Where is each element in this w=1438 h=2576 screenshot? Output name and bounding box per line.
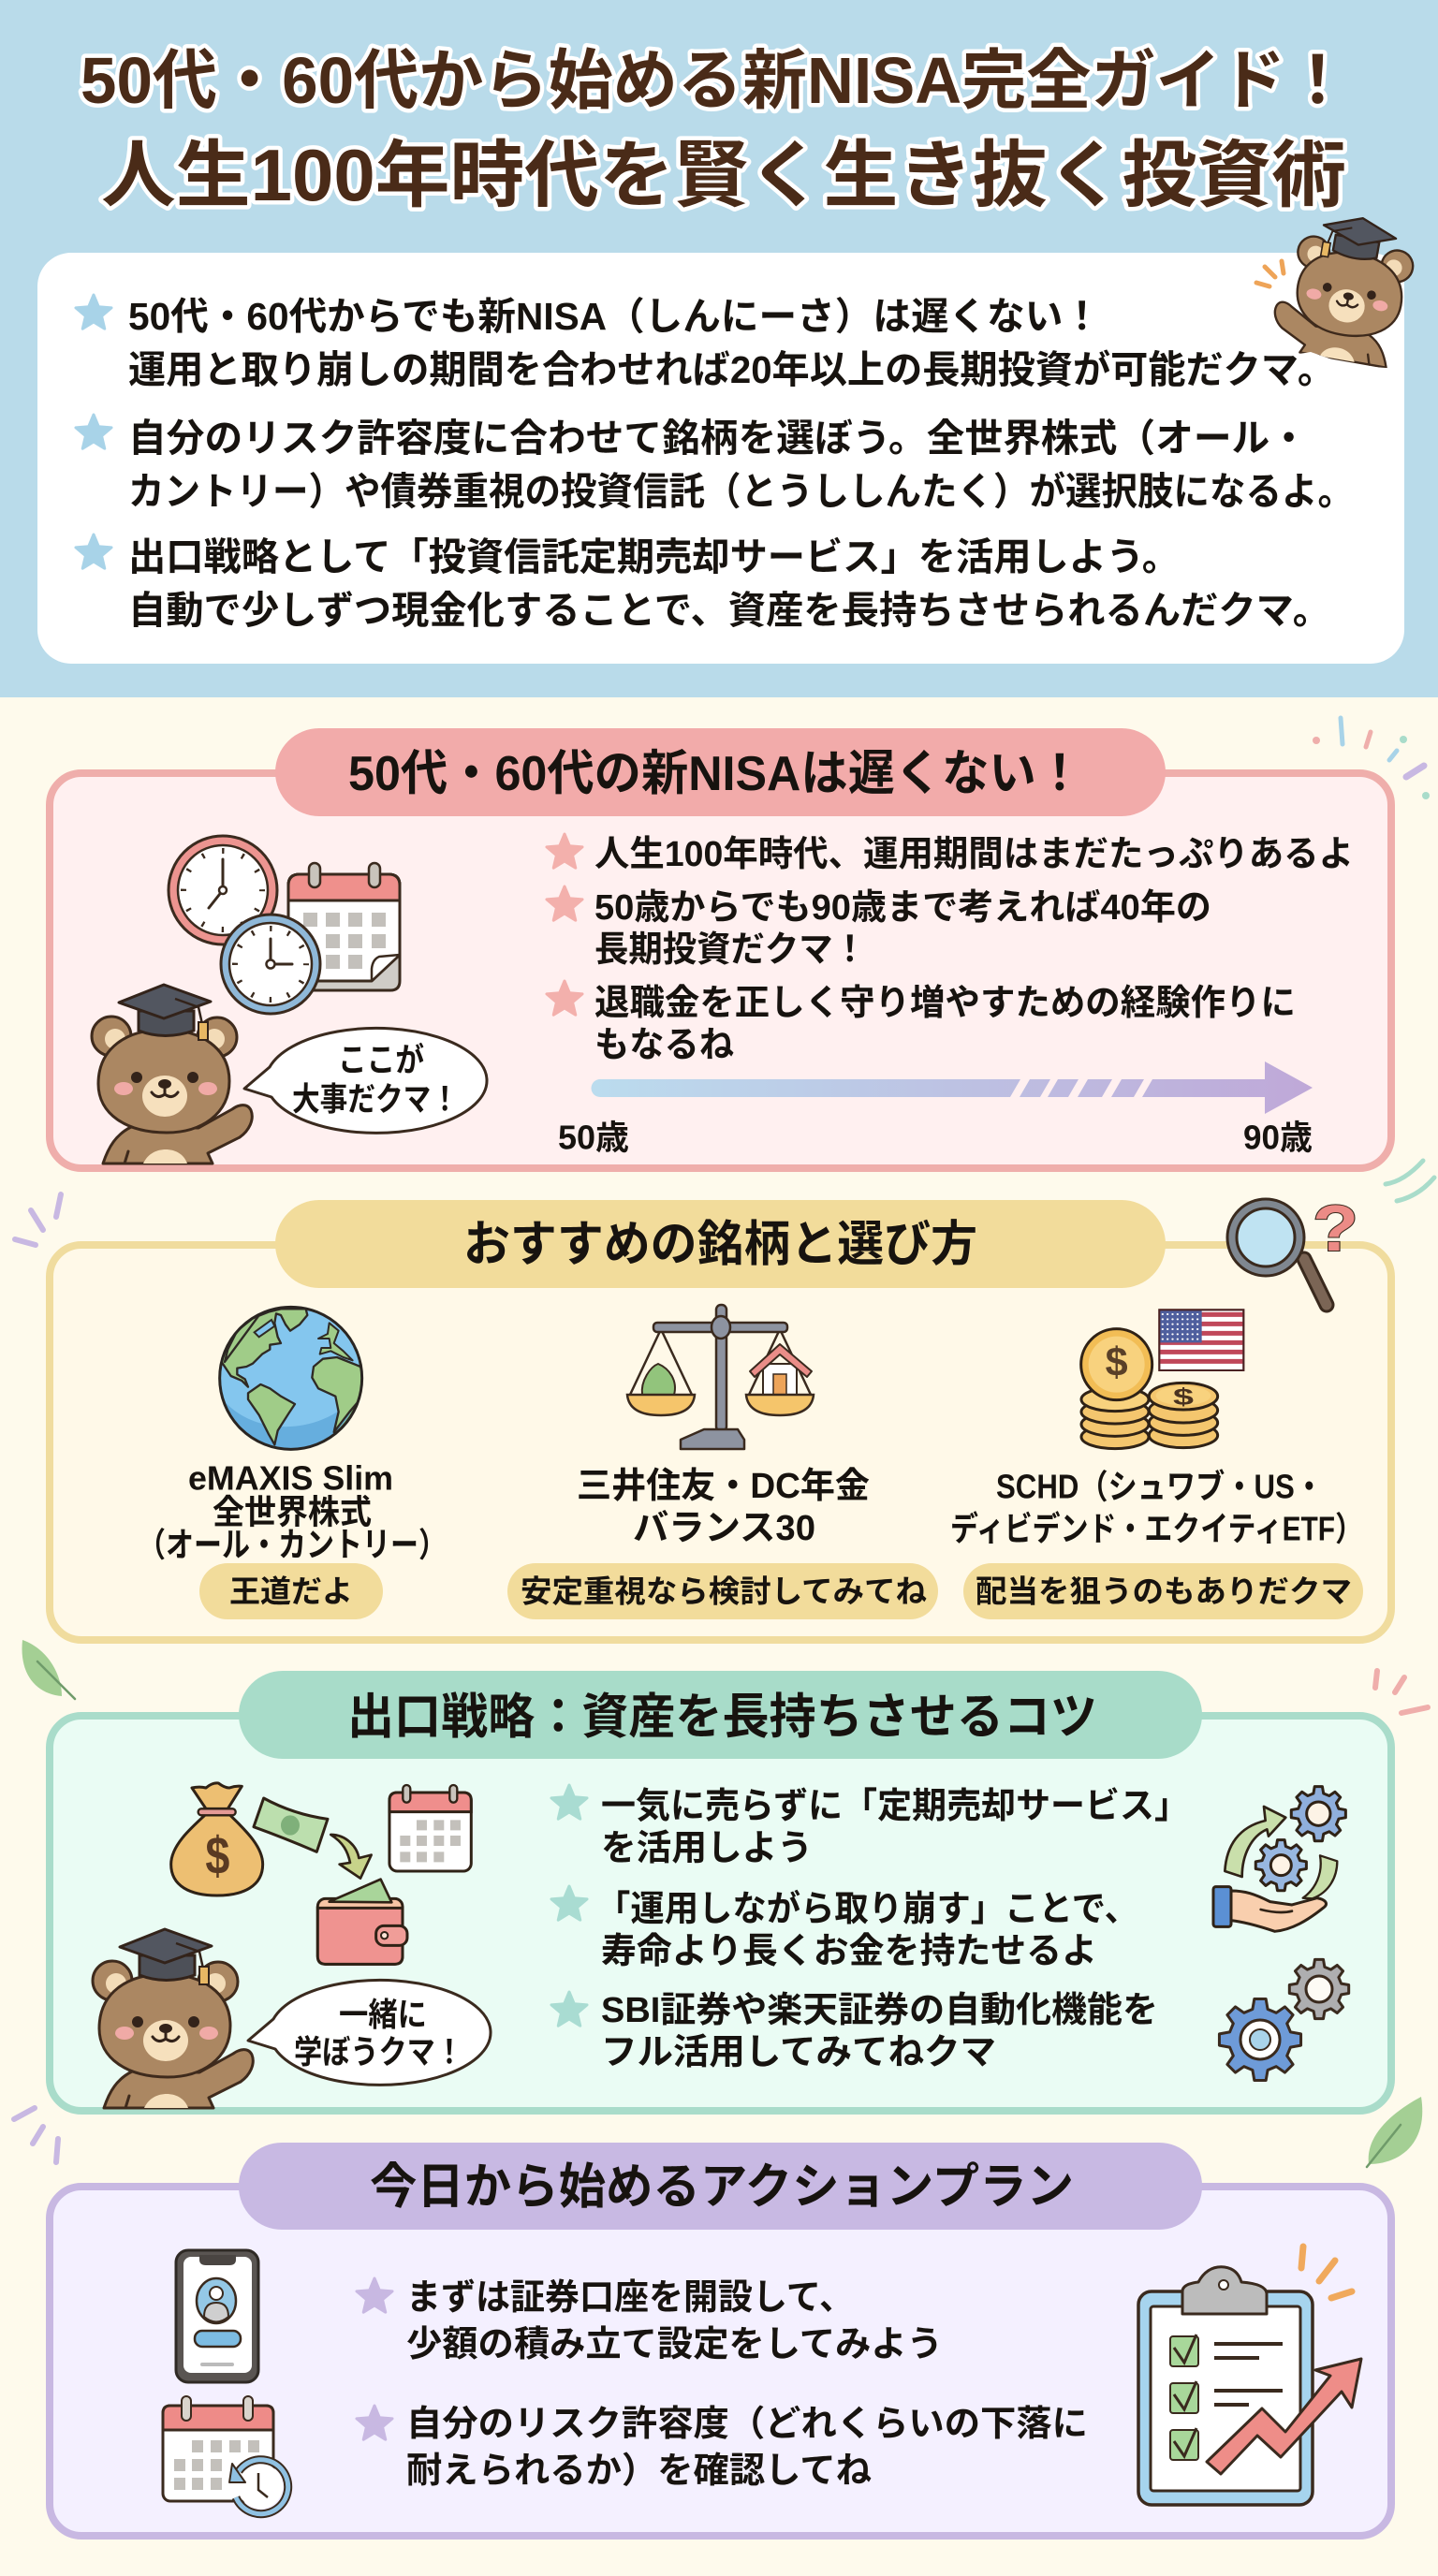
bullet list <box>357 2278 1088 2491</box>
icon: coins and flag: $ <box>1173 1383 1194 1410</box>
icon: arrow to wallet <box>330 1835 372 1879</box>
icon: coins and flag: $ <box>1106 1340 1128 1385</box>
icon: money bag: $ <box>205 1827 229 1886</box>
panel: recommended funds <box>50 1192 1391 1640</box>
icon: magnifier and question mark: ? <box>1313 1192 1358 1265</box>
title <box>81 44 1350 216</box>
summary panel <box>37 253 1404 664</box>
speech bubble: ここが <box>338 1043 424 1078</box>
bullet list: 自分のリスク許容度（どれくらいの下落に <box>406 2405 1088 2444</box>
summary bullet 1: 50代・60代からでも新NISA（しんにーさ）は遅くない！ <box>128 295 1101 338</box>
fund: eMAXIS Slim: （オール・カントリー） <box>138 1526 447 1563</box>
icon: large clock <box>169 836 277 944</box>
icons: money flow <box>171 1783 471 1964</box>
speech bubble: 一緒に <box>339 1998 427 2033</box>
icon: bear <box>92 985 252 1164</box>
fund: SCHD: SCHD（シュワブ・US・ <box>996 1468 1324 1505</box>
heading: not too late: 50代・60代の新NISAは遅くない！ <box>348 747 1083 801</box>
icon: coins and flag <box>1081 1310 1243 1449</box>
summary bullet 3: 出口戦略として「投資信託定期売却サービス」を活用しよう。 <box>128 535 1180 578</box>
icon: calendar <box>389 1785 471 1871</box>
fund: Mitsui Sumitomo <box>507 1467 938 1619</box>
timeline arrow: 50歳 <box>558 1118 629 1157</box>
fund: Mitsui Sumitomo: 三井住友・DC年金 <box>577 1467 870 1506</box>
heading: recommended funds <box>275 1200 1166 1288</box>
icon: money bag <box>171 1783 263 1895</box>
icon: waving bear <box>1256 206 1420 369</box>
heading: exit strategy <box>239 1671 1202 1759</box>
heading: action plan <box>239 2143 1202 2230</box>
bullet list: もなるね <box>594 1026 734 1065</box>
bullet list: フル活用してみてねクマ <box>601 2033 996 2072</box>
icon: gears <box>1219 1959 1349 2081</box>
title: 人生100年時代を賢く生き抜く投資術 <box>101 134 1346 216</box>
icon: calendar <box>288 863 400 990</box>
fund: eMAXIS Slim: 王道だよ <box>229 1574 353 1608</box>
heading: action plan: 今日から始めるアクションプラン <box>370 2160 1074 2215</box>
icon: magnifier and question mark <box>1227 1192 1358 1305</box>
fund: eMAXIS Slim <box>138 1458 447 1619</box>
fund: SCHD: ディビデンド・エクイティETF） <box>950 1509 1363 1548</box>
bullet list: 「運用しながら取り崩す」ことで、 <box>596 1890 1138 1929</box>
icon: small clock <box>221 915 320 1014</box>
icon: hand with gears <box>1213 1787 1345 1931</box>
panel: exit strategy <box>50 1671 1391 2111</box>
fund: SCHD <box>950 1468 1363 1619</box>
icon: balance scale <box>627 1305 814 1449</box>
bullet list: 少額の積み立て設定をしてみよう <box>406 2325 943 2364</box>
bullet list: 50歳からでも90歳まで考えれば40年の <box>594 888 1211 928</box>
heading: not too late <box>275 728 1166 816</box>
summary bullet 2: カントリー）や債券重視の投資信託（とうししんたく）が選択肢になるよ。 <box>128 470 1354 513</box>
summary bullet 3 <box>76 534 1330 632</box>
panel: action plan <box>50 2143 1391 2536</box>
summary bullet 1 <box>76 295 1335 391</box>
icon: smartphone <box>176 2250 258 2382</box>
bullet list: 長期投資だクマ！ <box>594 930 867 970</box>
heading: exit strategy: 出口戦略：資産を長持ちさせるコツ <box>347 1690 1097 1745</box>
fund: SCHD: 配当を狙うのもありだクマ <box>976 1574 1352 1608</box>
header band <box>0 0 1438 697</box>
speech bubble: 大事だクマ！ <box>292 1082 459 1118</box>
icon: checklist with rising arrow <box>1138 2247 1361 2505</box>
summary bullet 3: 自動で少しずつ現金化することで、資産を長持ちさせられるんだクマ。 <box>128 589 1330 632</box>
bullet list <box>551 1785 1189 2072</box>
bullet list: 一気に売らずに「定期売却サービス」 <box>601 1787 1189 1826</box>
bullet list: SBI証券や楽天証券の自動化機能を <box>601 1991 1158 2030</box>
icon: globe <box>215 1303 368 1453</box>
bullet list: 人生100年時代、運用期間はまだたっぷりあるよ <box>594 835 1354 874</box>
bullet list: まずは証券口座を開設して、 <box>406 2278 854 2318</box>
bullet list: 退職金を正しく守り増やすための経験作りに <box>594 984 1296 1023</box>
icon: calendar with clock <box>163 2396 288 2514</box>
bullet list: 耐えられるか）を確認してね <box>406 2452 872 2491</box>
speech bubble <box>244 1028 487 1133</box>
bullet list: を活用しよう <box>601 1829 813 1868</box>
fund: Mitsui Sumitomo: 安定重視なら検討してみてね <box>521 1574 927 1608</box>
fund: Mitsui Sumitomo: バランス30 <box>633 1509 815 1548</box>
icon: banknote <box>254 1798 328 1852</box>
speech bubble <box>248 1980 491 2085</box>
summary bullet 1: 運用と取り崩しの期間を合わせれば20年以上の長期投資が可能だクマ。 <box>128 348 1335 391</box>
timeline arrow <box>558 1061 1313 1157</box>
icon: bear <box>93 1929 253 2108</box>
panel: not too late <box>50 728 1391 1168</box>
decoration: ticks and leaves <box>14 1161 1434 2167</box>
bullet list <box>547 834 1354 1065</box>
title: 50代・60代から始める新NISA完全ガイド！ <box>81 44 1350 117</box>
summary bullet 2 <box>76 415 1354 513</box>
fund: eMAXIS Slim: 全世界株式 <box>213 1492 372 1531</box>
icon: wallet <box>317 1880 407 1964</box>
heading: recommended funds: おすすめの銘柄と選び方 <box>463 1218 977 1272</box>
summary bullet 2: 自分のリスク許容度に合わせて銘柄を選ぼう。全世界株式（オール・ <box>128 417 1308 460</box>
bullet list: 寿命より長くお金を持たせるよ <box>601 1932 1097 1971</box>
speech bubble: 学ぼうクマ！ <box>294 2035 463 2071</box>
timeline arrow: 90歳 <box>1243 1118 1313 1157</box>
decoration: top right ticks <box>1313 718 1430 799</box>
fund: eMAXIS Slim: eMAXIS Slim <box>188 1458 393 1498</box>
